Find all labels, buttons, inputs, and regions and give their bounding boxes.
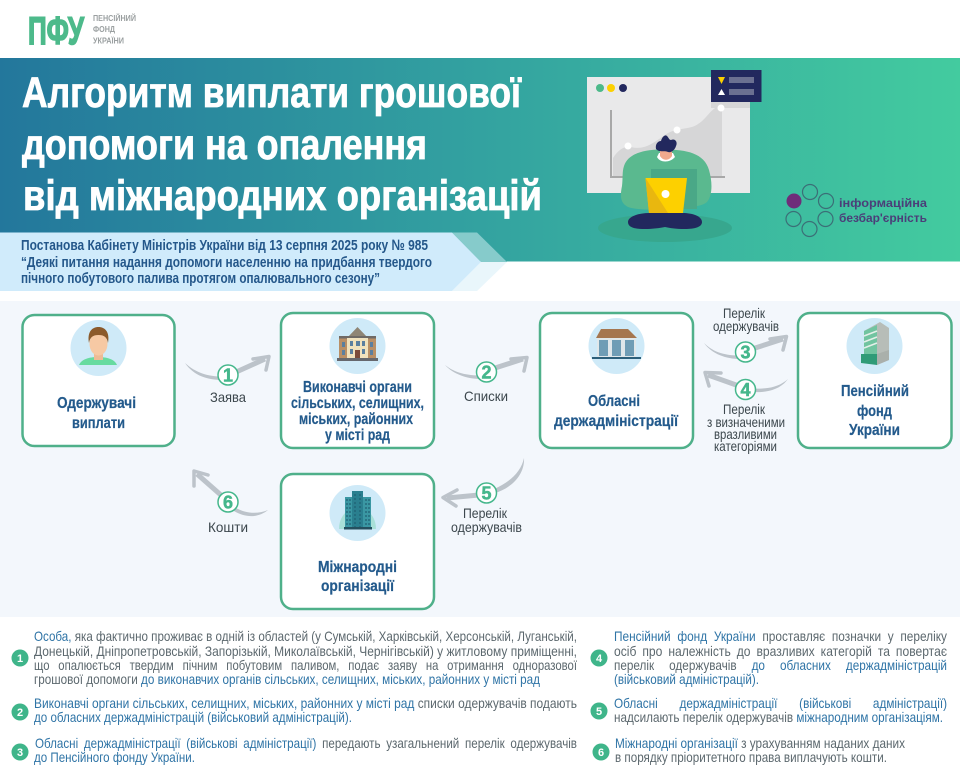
step 1 description: Донецькій, Дніпропетровській, Запорізькій, Миколаївській, Чернігівській) у житловому приміщенні, [34, 643, 577, 659]
step 2 description: до обласних держадміністрацій (військовий адміністрацій). [34, 709, 352, 725]
step 3 description: 3 [17, 747, 23, 759]
arrow 4: list with vulnerable categories: 4 [740, 380, 751, 400]
box: international organizations [281, 474, 434, 609]
box: international organizations: організації [321, 578, 394, 595]
step 2 description [12, 695, 577, 725]
logo: Pension Fund of Ukraine: ПЕНСІЙНИЙ [93, 12, 136, 23]
box: Pension Fund [798, 313, 952, 448]
arrow 4: list with vulnerable categories [705, 372, 788, 454]
arrow 2: lists: Списки [464, 388, 508, 404]
arrow 3: recipients list to Pension Fund: одержувачів [713, 318, 779, 334]
step 2 description: 2 [17, 707, 23, 719]
title [22, 69, 542, 220]
logo: Pension Fund of Ukraine: УКРАЇНИ [93, 36, 124, 46]
step 6 description: Міжнародні організації з урахуванням наданих даних [615, 735, 905, 751]
arrow 4: list with vulnerable categories: вразливими [714, 426, 777, 442]
title: допомоги на опалення [22, 121, 427, 169]
step 2 description: Виконавчі органи сільських, селищних, міських, районних у місті рад списки одержувачів подають [34, 695, 577, 711]
box: Pension Fund: фонд [857, 403, 892, 420]
step 1 description: 1 [17, 653, 23, 665]
header banner [0, 58, 960, 262]
step 3 description: до Пенсійного фонду України. [34, 749, 195, 765]
icon: person [79, 327, 117, 365]
box: international organizations: Міжнародні [318, 559, 397, 576]
arrow 6: funds: Кошти [208, 519, 248, 535]
subtitle ribbon: “Деякі питання надання допомоги населенню на придбання твердого [21, 254, 432, 271]
arrow 1: application: Заява [210, 389, 246, 405]
logo: information accessibility: безбар'єрність [839, 211, 927, 225]
step 3 description: Обласні держадміністрації (військові адміністрації) передають узагальнений перелік одержувачів [35, 735, 577, 751]
arrow 4: list with vulnerable categories: Перелік [723, 401, 766, 417]
box: Pension Fund: України [849, 422, 900, 439]
icon: regional administration building [592, 329, 641, 359]
box: executive bodies: сільських, селищних, [291, 395, 424, 412]
arrow 2: lists: 2 [481, 362, 492, 382]
box: executive bodies: у місті рад [325, 427, 390, 444]
arrow 6: funds [194, 471, 268, 535]
arrow 2: lists [445, 358, 527, 404]
arrow 4: list with vulnerable categories: з визначеними [707, 414, 785, 430]
step 5 description [590, 695, 947, 725]
step 4 description [590, 628, 947, 687]
box: recipients [22, 315, 174, 446]
step 6 description [592, 735, 905, 765]
logo: information accessibility: інформаційна [839, 196, 927, 210]
illustration: person with laptop in front of chart [587, 70, 762, 242]
step 5 description: 5 [596, 706, 602, 718]
box: executive bodies [281, 313, 434, 448]
box: regional administrations: Обласні [588, 393, 640, 410]
step 6 description: в порядку пріоритетного права виплачують кошти. [615, 749, 887, 765]
step 4 description: 4 [596, 653, 603, 665]
arrow 1: application [185, 356, 269, 405]
title: Алгоритм виплати грошової [22, 69, 522, 117]
box: executive bodies: міських, районних [299, 411, 413, 428]
box: recipients: виплати [72, 415, 125, 432]
arrow 1: application: 1 [223, 366, 233, 386]
step 1 description [12, 628, 577, 687]
step 1 description: що опалюється твердим пічним побутовим паливом, подає заяву на отримання одноразової [34, 657, 577, 673]
subtitle ribbon [0, 232, 507, 291]
logo: Pension Fund of Ukraine: ФОНД [93, 24, 115, 34]
subtitle ribbon: Постанова Кабінету Міністрів України від 13 серпня 2025 року № 985 [21, 237, 428, 254]
title: від міжнародних організацій [23, 172, 542, 220]
arrow 6: funds: 6 [223, 492, 233, 512]
icon: high-rise building [339, 491, 376, 530]
box: regional administrations: держадміністрації [554, 413, 678, 430]
arrow 5: recipients list to international organizations [443, 458, 524, 535]
box: executive bodies: Виконавчі органи [303, 379, 412, 396]
step 6 description: 6 [598, 747, 604, 759]
subtitle ribbon: пічного побутового палива протягом опалювального сезону” [21, 270, 380, 287]
arrow 5: recipients list to international organizations: 5 [481, 484, 492, 504]
arrow 3: recipients list to Pension Fund: 3 [740, 342, 751, 362]
arrow 3: recipients list to Pension Fund: Перелік [723, 305, 766, 321]
logo: information accessibility [786, 184, 927, 236]
box: Pension Fund: Пенсійний [841, 383, 909, 400]
icon: Pension Fund building [861, 322, 889, 365]
arrow 4: list with vulnerable categories: категоріями [714, 438, 777, 454]
icon: town hall building [337, 327, 378, 361]
step 3 description [12, 735, 577, 765]
arrow 3: recipients list to Pension Fund [704, 305, 786, 362]
arrow 5: recipients list to international organizations: Перелік [463, 505, 508, 521]
step 1 description: грошової допомоги до виконавчих органів сільських, селищних, міських, районних у місті рад [34, 671, 540, 687]
box: regional administrations [540, 313, 693, 448]
logo: Pension Fund of Ukraine: ПФУ [28, 10, 84, 53]
step 4 description: (військовий адміністрацій). [614, 671, 759, 687]
flow diagram background [0, 301, 960, 617]
arrow 5: recipients list to international organizations: одержувачів [451, 519, 522, 535]
box: recipients: Одержувачі [57, 395, 136, 412]
step 1 description: Особа, яка фактично проживає в одній із областей (у Сумській, Харківській, Херсонській, Луганській, [34, 628, 577, 644]
